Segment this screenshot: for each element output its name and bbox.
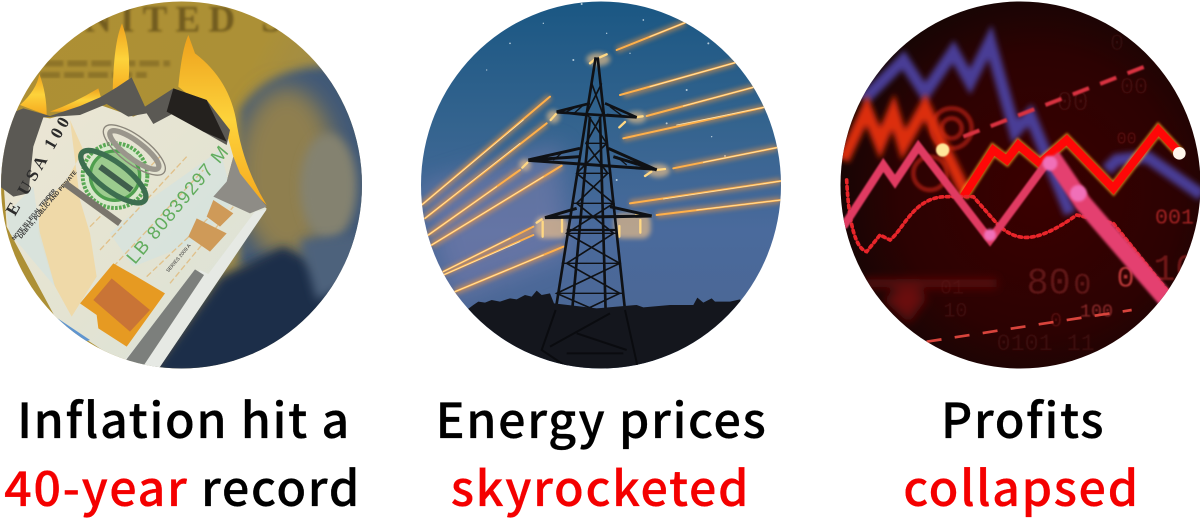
insulators	[522, 54, 665, 237]
faint binary digits	[940, 32, 1197, 358]
caption: skyrocketed: skyrocketed	[451, 450, 750, 520]
photo: burning hundred dollar bill: DEBTS, PUBLIC AND PRIVATE	[18, 170, 79, 240]
wire cores	[422, 23, 781, 292]
photo: glowing power lines and pylon	[410, 0, 787, 373]
light dots	[936, 143, 949, 157]
bottom dashed line	[927, 310, 1132, 342]
copper 100 mark	[188, 200, 233, 252]
faint binary digits: 00	[1117, 130, 1137, 149]
photo: falling red stock chart	[835, 0, 1200, 372]
insulator glows	[519, 53, 670, 238]
blurred banknote background	[147, 67, 373, 377]
caption: collapsed: collapsed	[903, 450, 1140, 520]
series mark: SERIES 2009 A	[165, 243, 193, 274]
faint binary digits: 80	[1027, 263, 1071, 305]
faint binary digits: 00	[1120, 75, 1148, 101]
glowing wires	[422, 23, 781, 292]
script lines	[90, 157, 233, 283]
bill tan watermark	[38, 120, 97, 317]
burnt edge	[0, 77, 230, 197]
orange bell	[80, 263, 165, 347]
faint binary digits: 0	[1117, 263, 1135, 297]
serial number: LB 80839297 M	[122, 142, 232, 268]
rings	[913, 108, 972, 190]
red line glow	[963, 130, 1180, 197]
wire glow	[422, 23, 781, 292]
faint binary digits: 10	[943, 301, 967, 324]
red low band	[863, 283, 997, 317]
faint binary digits: 001	[1155, 205, 1194, 230]
faint binary digits: 0	[1110, 32, 1124, 58]
faint binary digits: 00	[1057, 89, 1089, 119]
green seal	[83, 143, 147, 208]
pylon base over trees	[542, 310, 638, 370]
photo: burning hundred dollar bill	[0, 0, 373, 377]
dotted line	[847, 180, 1167, 290]
pink falling line	[843, 147, 1050, 240]
bill edge strip	[123, 209, 267, 372]
pale left glow	[420, 143, 567, 300]
faint binary digits: 0101 11	[997, 332, 1095, 358]
caption: profits: Profits	[941, 382, 1105, 452]
corner lettering: E USA 100	[2, 114, 73, 219]
caption: record: 40-year record	[4, 450, 361, 520]
bright red line	[963, 130, 1180, 197]
upper dashed line	[963, 63, 1155, 137]
pylon	[528, 57, 657, 370]
faint binary digits: 100	[1080, 302, 1113, 323]
faint binary digits: 0	[1050, 311, 1062, 334]
caption: inflation: Inflation hit a	[17, 382, 351, 452]
blurred small lettering	[40, 63, 170, 75]
flames	[20, 23, 267, 205]
side lettering on bill: NOTE IS LEGAL TENDER	[11, 188, 58, 242]
caption: energy prices: Energy prices	[436, 382, 767, 452]
blurred purple line	[863, 42, 1200, 213]
faint binary digits: 01	[940, 277, 964, 300]
blurred orange line	[843, 107, 965, 192]
bill body	[0, 100, 267, 372]
faint binary digits: 0	[1073, 269, 1091, 303]
pale blue wash	[7, 150, 233, 287]
blue corner	[56, 318, 90, 342]
tree line	[468, 290, 741, 368]
stars	[486, 3, 726, 181]
large 100 numeral	[65, 116, 173, 223]
pink highlights	[984, 156, 1087, 241]
faint binary digits: 10	[1153, 250, 1197, 292]
